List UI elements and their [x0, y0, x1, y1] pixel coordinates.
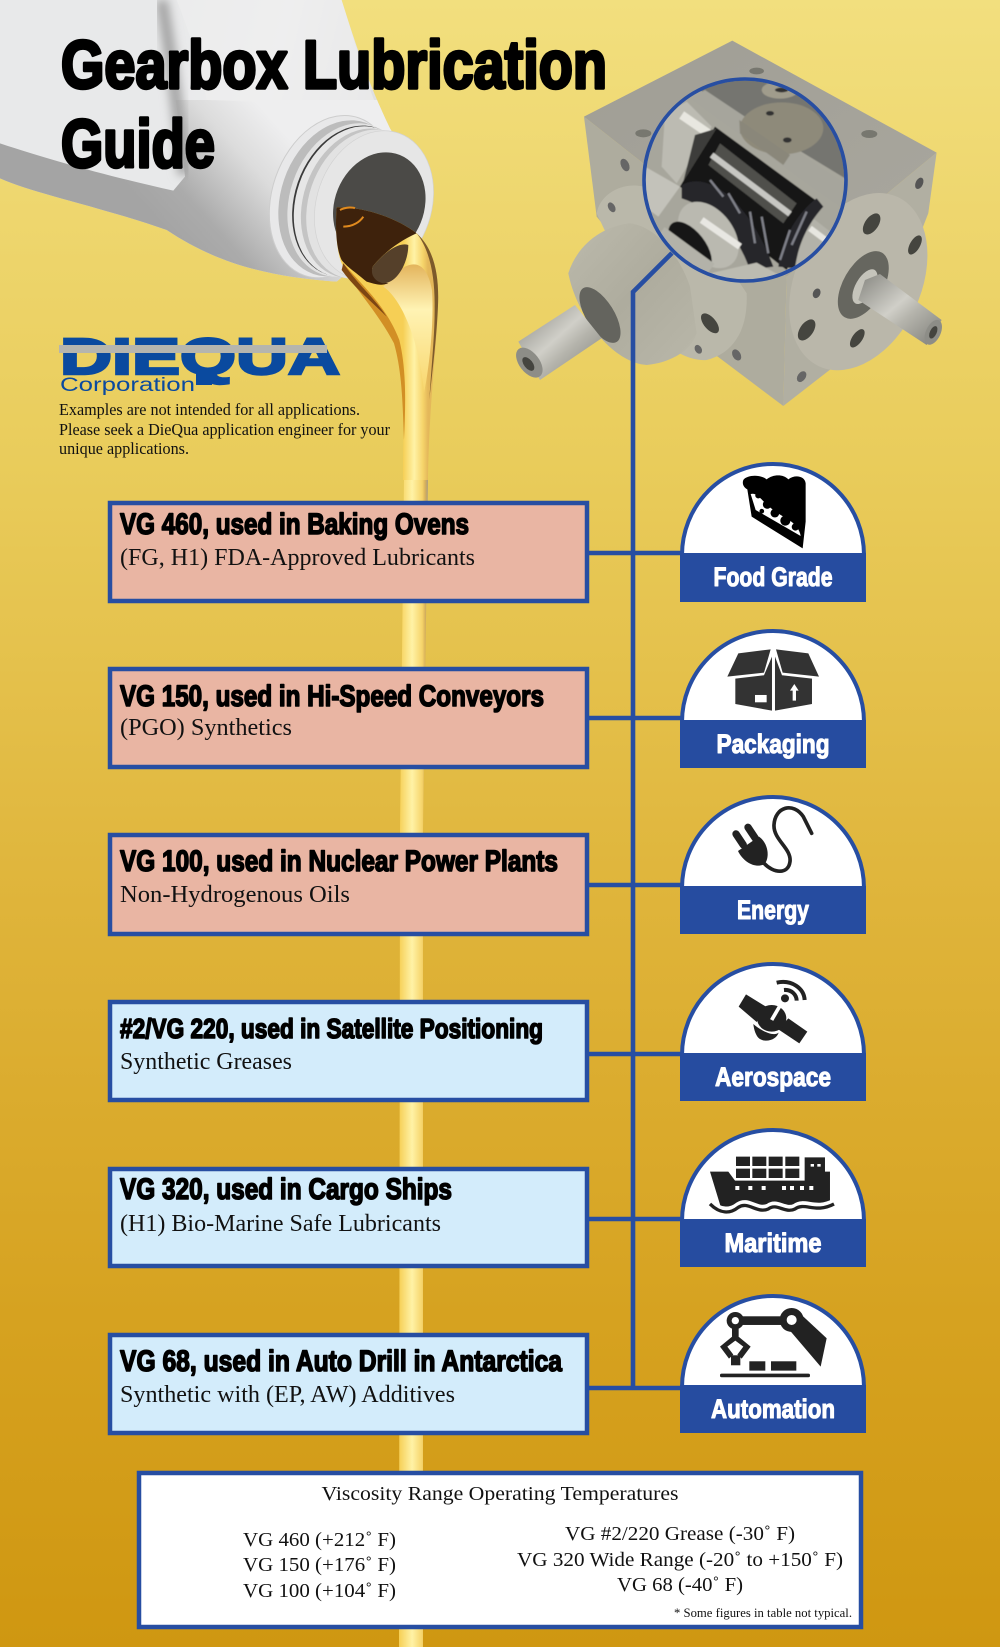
box: VG 100 energy: [110, 835, 587, 934]
badge: Maritime: Maritime: [724, 1228, 822, 1258]
icon: open box: [727, 649, 819, 711]
bottle neck rings: [248, 99, 453, 295]
icon: cargo ship: [710, 1157, 834, 1212]
badge: Packaging: Packaging: [716, 729, 830, 759]
disclaimer text: Please seek a DieQua application engineer for your: [59, 420, 390, 439]
badge: Packaging: [680, 631, 866, 768]
box: VG 150 packaging: VG 150, used in Hi-Speed Conveyors: [120, 680, 544, 713]
title: [61, 27, 607, 182]
box: VG 150 packaging: [110, 669, 587, 767]
box: VG 220 aerospace: Synthetic Greases: [120, 1049, 292, 1075]
box: VG 460 food grade: (FG, H1) FDA-Approved Lubricants: [120, 545, 475, 571]
box: VG 68 automation: Synthetic with (EP, AW) Additives: [120, 1382, 455, 1408]
box: VG 100 energy: Non-Hydrogenous Oils: [120, 882, 350, 908]
left flange: [597, 185, 747, 360]
right seal: [827, 243, 899, 327]
icon: satellite: [739, 982, 807, 1043]
gearbox top face: [584, 41, 937, 277]
right column: VG 68 (-40˚ F): [617, 1574, 743, 1596]
badge: Energy: [680, 797, 866, 934]
box: VG 68 automation: [110, 1335, 587, 1433]
left column: [243, 1529, 396, 1602]
badge: Energy: Energy: [737, 895, 809, 925]
right shaft: [858, 274, 942, 345]
badge: Food Grade: [680, 464, 866, 602]
right column: VG 320 Wide Range (-20˚ to +150˚ F): [517, 1549, 843, 1571]
footnote: * Some figures in table not typical.: [674, 1606, 852, 1620]
box: VG 100 energy: VG 100, used in Nuclear Power Plants: [120, 845, 558, 878]
badge: Automation: Automation: [711, 1394, 835, 1424]
logo: DieQua Corporation: DIEQUA: [60, 328, 340, 385]
box: VG 220 aerospace: #2/VG 220, used in Satellite Positioning: [120, 1013, 543, 1044]
left column: VG 150 (+176˚ F): [243, 1554, 396, 1576]
box: VG 460 food grade: [110, 503, 587, 601]
box: VG 150 packaging: (PGO) Synthetics: [120, 715, 292, 741]
left housing: [568, 223, 697, 365]
gearbox right face: [783, 153, 937, 406]
right column: VG #2/220 Grease (-30˚ F): [565, 1523, 795, 1545]
table title: Viscosity Range Operating Temperatures: [322, 1483, 679, 1505]
box: VG 320 maritime: (H1) Bio-Marine Safe Lubricants: [120, 1211, 441, 1237]
badge: Aerospace: [680, 964, 866, 1101]
icon: plug and cord: [736, 808, 812, 871]
box: VG 460 food grade: VG 460, used in Baking Ovens: [120, 508, 469, 541]
title: Gearbox Lubrication: [61, 27, 607, 103]
badge: Automation: [680, 1296, 866, 1433]
gearbox cutaway circle: [646, 80, 844, 279]
gearbox illustration: [511, 41, 955, 406]
gearbox left face: [584, 117, 787, 406]
left column: VG 100 (+104˚ F): [243, 1580, 396, 1602]
oil stream: [399, 478, 428, 1647]
logo: DieQua Corporation: Corporation: [60, 375, 195, 396]
title: Guide: [61, 106, 215, 182]
box: VG 320 maritime: VG 320, used in Cargo Ships: [120, 1173, 452, 1206]
badge: Food Grade: Food Grade: [714, 562, 832, 592]
logo: DieQua Corporation: [59, 328, 340, 396]
box: VG 320 maritime: [110, 1169, 587, 1266]
right column: [517, 1523, 843, 1596]
table: viscosity range operating temperatures: [139, 1473, 861, 1627]
oil bottle: [0, 0, 453, 295]
left shaft: [518, 305, 602, 380]
oil pour from spout: [336, 207, 438, 480]
disclaimer text: [59, 400, 390, 458]
badge: Maritime: [680, 1130, 866, 1267]
connector: frame of lines from gearbox to badges: [589, 79, 846, 1388]
right flange: [762, 171, 955, 393]
box: VG 220 aerospace: [110, 1002, 587, 1100]
icon: pie slice: [743, 475, 806, 548]
box: VG 68 automation: VG 68, used in Auto Drill in Antarctica: [120, 1345, 562, 1378]
left bearing: [571, 281, 629, 349]
icon: robot arm: [720, 1308, 827, 1377]
left column: VG 460 (+212˚ F): [243, 1529, 396, 1551]
badge: Aerospace: Aerospace: [715, 1062, 831, 1092]
disclaimer text: unique applications.: [59, 439, 189, 458]
disclaimer text: Examples are not intended for all applications.: [59, 400, 360, 419]
